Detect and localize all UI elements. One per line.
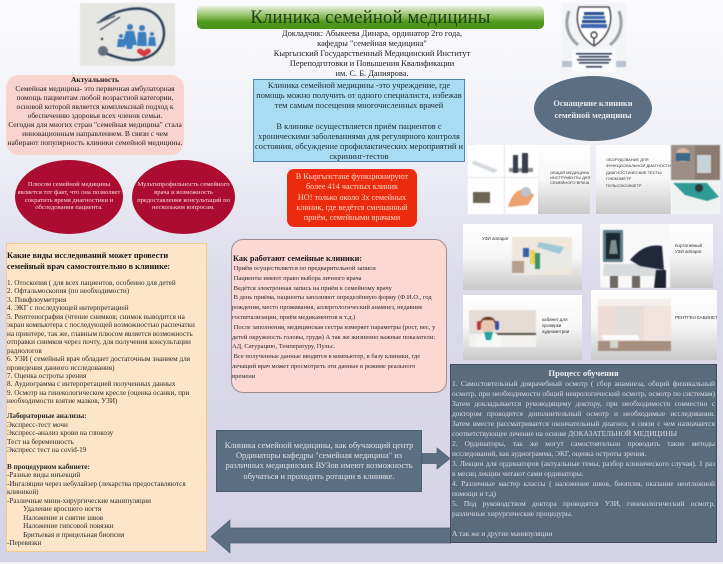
list: процедурный кабинет: -Перевязки	[7, 539, 41, 547]
list: лабораторные анализы: Лабораторные анализы:	[7, 412, 87, 420]
text: как работают: времени	[232, 373, 255, 380]
text: как работают: Приём осуществляется по предварительной записи	[234, 265, 376, 272]
text: плюсы: является тот факт, что она позволяет	[18, 189, 120, 196]
arrow: к процессу обучения	[422, 447, 450, 470]
text: процесс обучения: исследований, как аудиограмма, ЭКГ, оценка остроты зрения.	[452, 449, 646, 458]
text: плюсы: обследования пациента.	[35, 204, 103, 211]
author block: Кыргызский Государственный Медицинский Институт	[274, 49, 470, 58]
author block	[274, 29, 470, 78]
text: оснащение: Оснащение клиники	[553, 99, 633, 108]
text: определение	[255, 81, 463, 161]
panel: процесс обучения	[450, 364, 717, 543]
text: статистика: клиник, где ведётся смешанный	[296, 203, 408, 212]
panel: фото оборудования 1	[468, 145, 590, 214]
text: определение: состояния, обсуждение профилактических мероприятий и	[255, 142, 463, 151]
heading: виды исследований: семейный врач самостоятельно в клинике:	[7, 262, 170, 271]
text: как работают: АД, Сатурацию, Температуру, Пульс.	[232, 343, 335, 350]
text: процесс обучения: А так же и другие манипуляции	[452, 529, 552, 538]
list: исследования: 5. Рентгенография (чтение снимков; снимок выводится на	[7, 313, 185, 321]
text: процесс обучения: 4. Различные мастер классы ( наложение швов, биопсия, оказание неотложной	[452, 479, 715, 488]
text: актуальность: набирают популярность клиники семейной медицины.	[7, 138, 183, 147]
text: процесс обучения: помощи и т.д)	[452, 489, 496, 498]
text: процесс обучения: 5. Под руководством доктора проводятся УЗИ, гинекологический осмотр,	[452, 499, 715, 508]
list: процедурный кабинет: Бритьевая и прицельная биопсия	[23, 531, 124, 539]
text: определение: В клинике осуществляется приём пациентов с	[276, 122, 442, 131]
text: актуальность: Актуальность	[71, 75, 119, 84]
list: лабораторные анализы: Экспресс-тест мочи	[7, 421, 68, 429]
text: плюсы: Плюсом семейной медицины	[28, 181, 110, 188]
list: лабораторные анализы: Экспресс тест на covid-19	[7, 446, 86, 454]
text: определение: скрининг-тестов	[329, 152, 389, 161]
heading: процесс обучения: Процесс обучения	[548, 368, 619, 378]
card: рентген кабинет: РЕНТГЕН КАБИНЕТ	[675, 315, 717, 320]
text: процесс обучения: соответствующее лечение на основе ДОКАЗАТЕЛЬНОЙ МЕДИЦИНЫ	[452, 429, 677, 438]
text: как работают: Ведётся электронная запись на приём к семейному врачу	[234, 285, 392, 292]
card: список оборудования: ПУЛЬСОКСИМЕТР	[606, 183, 642, 188]
heading: виды исследований: Какие виды исследований может провести	[7, 251, 168, 260]
card: список оборудования	[596, 145, 671, 214]
text: как работают: После заполнения, медицинская сестра измеряет параметры (рост, вес, у	[234, 324, 435, 331]
arrow: к видам исследований	[210, 519, 451, 554]
card: рентген кабинет	[591, 290, 717, 360]
photo grid: приборы	[468, 145, 538, 214]
list: исследования: на принтере, так же, главным плюсом является возможность	[7, 330, 193, 338]
ellipse: мультипрофильность	[132, 160, 235, 234]
text: обучающий центр	[225, 441, 413, 481]
card: кабинет для проверки слуха: проверки	[542, 323, 561, 328]
text: актуальность: Семейная медицина- это первичная амбулаторная	[15, 84, 175, 93]
photo: осмотр пациента	[670, 144, 721, 214]
text: процесс обучения	[452, 379, 715, 538]
text: обучающий центр: Ординаторы кафедры "семейная медицина" из	[236, 451, 402, 460]
list: исследования: 6. УЗИ ( семейный врач обладает достаточным знанием для	[7, 355, 190, 363]
heading: как работают: Как работают семейные клиники:	[233, 254, 362, 263]
text: оснащение: семейной медицины	[554, 110, 632, 120]
list: исследования: 2. Офтальмоскопия (по необходимости)	[7, 287, 129, 295]
card: портативный УЗИ аппарат	[600, 224, 713, 288]
card: текст оборудования	[538, 145, 590, 214]
card: УЗИ аппарат	[463, 224, 582, 290]
list: лабораторные анализы: Тест на беременность	[7, 438, 74, 446]
text: процесс обучения: в месяц лекции читают сами ординаторы.	[452, 469, 584, 478]
text: как работают: детей окружность головы, груди) А так же жизненно важные показатели:	[232, 334, 435, 341]
text: обучающий центр: различных медицинских ВУЗов имеют возможность	[225, 461, 413, 470]
text: как работают: Пациенты имеют право выбора личного врача	[234, 275, 362, 282]
text: статистика: приём, семейными врачами	[304, 213, 400, 222]
text: как работают: рождения, место проживания, аллергологический анамнез, недавние	[232, 304, 423, 311]
list: процедурный кабинет: клиникой)	[7, 488, 39, 496]
text: процесс обучения: различные хирургические процедуры.	[452, 509, 573, 518]
photo: портативный УЗИ	[600, 229, 670, 288]
text: как работают: В день приёма, пациенты заполняют определённую форму (Ф.И.О., год	[234, 294, 432, 301]
card: кабинет для проверки слуха	[463, 295, 582, 360]
text: мультипрофильность: Мультипрофильность семейного	[137, 181, 230, 188]
author block: кафедры "семейная медицина"	[317, 39, 427, 48]
text: определение: Клиника семейной медицины -это учреждение, где	[268, 81, 450, 90]
text: плюсы: сократить время диагностики и	[25, 197, 113, 204]
list: исследования: 8. Аудиограмма с интерпретацией полученных данных	[7, 380, 175, 388]
list: исследования	[7, 279, 195, 405]
text: статистика: более 414 частных клиник	[306, 182, 398, 191]
list: процедурный кабинет	[7, 463, 186, 547]
list: исследования: отправки снимков через почту, для получения консультации	[7, 338, 191, 346]
card: список оборудования: ГЛЮКОМЕТР	[606, 176, 631, 181]
list: процедурный кабинет: -Различные мини-хирургические манипуляции	[7, 497, 151, 505]
panel: определение клиники	[253, 79, 465, 162]
text: актуальность: Сегодня для многих стран "семейная медицина" стала	[8, 120, 182, 129]
list: процедурный кабинет: Наложение гипсовой повязки	[23, 522, 114, 530]
author block: Переподготовки и Повышения Квалификации	[290, 59, 454, 68]
list: исследования: 9. Осмотр на гинекологическом кресле (оценка осанки, при	[7, 389, 189, 397]
text: определение: тем самым посещения многочисленных врачей	[275, 101, 443, 110]
text: актуальность: инновационным направлением. В связи с чем	[22, 129, 168, 138]
icon: stethoscope with family	[80, 2, 176, 66]
author block: им. С. Б. Даниярова.	[335, 69, 408, 78]
panel: как работают клиники	[231, 239, 447, 393]
list: исследования: экран компьютера с последующей возможностью распечатки	[7, 321, 195, 329]
panel: виды исследований	[6, 243, 207, 552]
card: список оборудования: ДИАГНОСТИЧЕСКИЕ ТЕСТЫ	[606, 170, 662, 175]
list: исследования: 3. Пикфлоуметрия	[7, 295, 66, 304]
list: процедурный кабинет: -Ингаляции через небулайзер (лекарства предоставляются	[7, 480, 186, 488]
text: мультипрофильность: врача и возможность	[154, 189, 213, 196]
text: статистика: В Кыргызстане функционируют	[296, 172, 408, 181]
list: процедурный кабинет: Наложение и снятие швов	[23, 514, 103, 522]
text: мультипрофильность	[137, 181, 230, 211]
text: мультипрофильность: предоставления консультаций по	[137, 197, 230, 204]
text: плюсы	[18, 181, 120, 211]
text: как работают: Все полученные данные вводятся в компьютер, в базу клиники, где	[234, 353, 420, 360]
card: кабинет для проверки слуха: аудиометрии	[542, 329, 569, 334]
panel: статистика Кыргызстан	[287, 169, 417, 227]
panel: актуальность	[6, 75, 184, 155]
text: определение: помощь можно получить от одного специалиста, избежав	[256, 91, 462, 100]
list: процедурный кабинет: Удаление вросшего ногтя	[23, 505, 101, 513]
author block: Докладчик: Абыкеева Динара, ординатор 2го года,	[282, 29, 462, 38]
heading: виды исследований	[7, 251, 170, 271]
text: обучающий центр: Клиника семейной медицины, как обучающий центр	[225, 441, 413, 450]
text: процесс обучения: Затем вместе рассматривается окончательный диагноз, в связи с чем назначается	[452, 419, 715, 428]
text: мультипрофильность: нескольким вопросам.	[152, 204, 215, 211]
ellipse: оснащение клиники	[534, 76, 652, 141]
text: определение: хроническими заболеваниями для регулярного контроля	[258, 132, 460, 141]
ellipse: плюсы	[15, 160, 123, 234]
list: лабораторные анализы: Экспресс-анализ крови на глюкозу	[7, 429, 113, 437]
text: обучающий центр: обучаться и проходить ротации в клинике.	[243, 472, 395, 481]
list: лабораторные анализы	[7, 412, 114, 454]
title bar	[197, 6, 544, 29]
card: текст оборудования: ОБЩАЯ МЕДИЦИНА	[550, 170, 589, 175]
card: текст оборудования: СЕМЕЙНОГО ВРАЧА	[550, 180, 589, 185]
card: портативный УЗИ аппарат: УЗИ аппарат	[675, 249, 702, 254]
text: процесс обучения: 2. Ординаторы, так же могут самостоятельно проводить такие методы	[452, 439, 715, 448]
list: исследования: 4. ЭКГ с последующей интерпретацией	[7, 304, 129, 312]
list: процедурный кабинет: В процедурном кабинете:	[7, 463, 90, 471]
bottom strip	[0, 562, 723, 564]
title: Клиника семейной медицины	[250, 7, 491, 28]
text: актуальность: обеспечению здоровья всех членов семьи.	[28, 111, 162, 120]
photo: аудиометрия	[468, 310, 537, 348]
photo: УЗИ аппарат	[512, 236, 572, 275]
text: процесс обучения: осмотр, при необходимости общий неврологический осмотр, осмотр по системам)	[452, 389, 715, 398]
text: как работают	[232, 265, 436, 380]
text: процесс обучения: 1. Самостоятельный доврачебный осмотр ( сбор анамнеза, общий физикальный	[452, 379, 715, 388]
list: исследования: радиологов	[7, 347, 42, 355]
icon: institute logo	[562, 5, 626, 68]
panel: обучающий центр	[216, 430, 422, 492]
photo: рентген кабинет	[598, 299, 672, 352]
text: статистика	[296, 172, 408, 222]
text: процесс обучения: 3. Лекции для ординаторов (актуальные темы, разбор клинического случая). 1 раз	[452, 459, 715, 468]
text: актуальность: помощь пациентам любой возрастной категории,	[16, 93, 174, 102]
card: портативный УЗИ аппарат: портативный	[675, 243, 702, 248]
list: исследования: необходимости взятие мазков, УЗИ)	[7, 397, 117, 405]
card: текст оборудования: ИНСТРУМЕНТЫ ДЛЯ	[550, 175, 590, 180]
list: исследования: 7. Оценка остроты зрения	[7, 372, 86, 380]
text: процесс обучения: доктором проводится дополнительный осмотр и необходимые исследования.	[452, 409, 715, 418]
card: кабинет для проверки слуха: кабинет для	[542, 317, 568, 322]
card: список оборудования: ОБОРУДОВАНИЕ ДЛЯ	[606, 157, 649, 162]
text: актуальность	[7, 75, 183, 147]
card: УЗИ аппарат: УЗИ аппарат	[482, 236, 509, 241]
text: статистика: НО! только около 3х семейных	[298, 193, 406, 202]
text: как работают: госпитализации, приём медикаментов и т.д.)	[232, 314, 355, 321]
list: процедурный кабинет: -Разные виды инъекций	[7, 471, 80, 479]
text: актуальность: основой которой является комплексный подход к	[17, 102, 173, 111]
list: исследования: 1. Отоскопия ( для всех пациентов, особенно для детей	[7, 279, 176, 287]
text: как работают: лечащий врач может просмотреть эти данные в режиме реального	[232, 363, 415, 370]
text: оснащение	[553, 99, 633, 120]
list: исследования: проведения данного исследования)	[7, 364, 114, 372]
panel: фото оборудования 2	[596, 145, 720, 214]
text: процесс обучения: Затем докладывается руководящему доктору, при необходимости совместно с	[452, 399, 715, 408]
